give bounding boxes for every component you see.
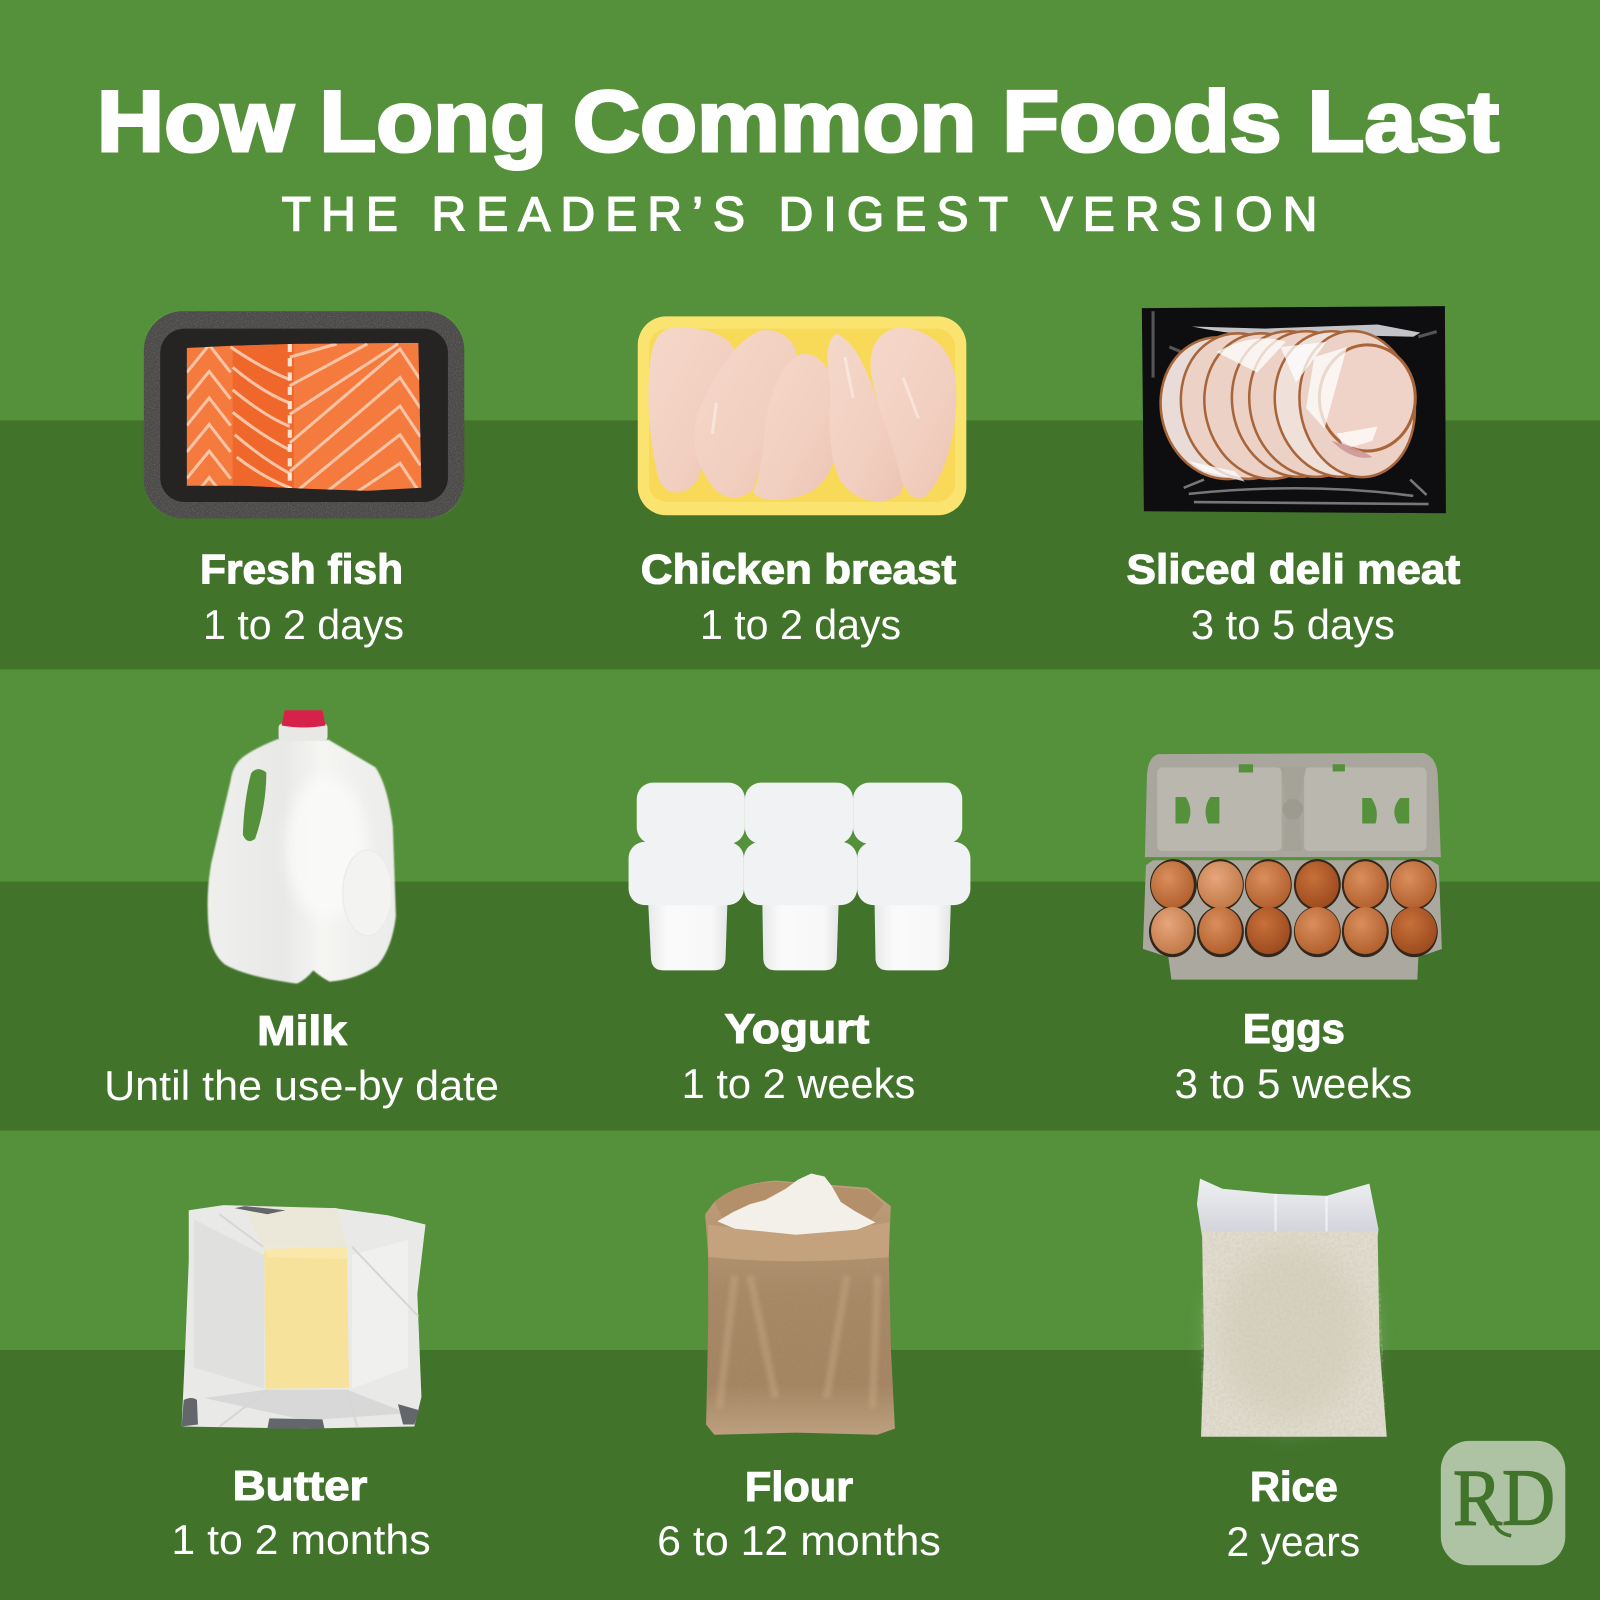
label: milk: Milk — [257, 1007, 348, 1054]
label: eggs: Eggs — [1243, 1005, 1345, 1052]
icon: plastic bag of rice — [1197, 1179, 1387, 1437]
label: chicken breast: Chicken breast — [641, 546, 956, 593]
icon: salmon in dark tray — [144, 311, 464, 518]
label: yogurt: Yogurt — [724, 1005, 869, 1052]
label: fresh fish: Fresh fish — [200, 546, 403, 593]
item: flour — [657, 1173, 941, 1564]
subtitle: THE READER’S DIGEST VERSION — [282, 189, 1317, 242]
logo: RD badge — [1441, 1441, 1565, 1565]
label: butter: Butter — [233, 1462, 367, 1509]
label: flour: Flour — [745, 1463, 853, 1510]
icon: butter on wrapper — [182, 1205, 426, 1429]
label: rice: Rice — [1250, 1463, 1338, 1510]
item: chicken breast — [638, 316, 966, 648]
item: fresh fish — [144, 311, 464, 648]
value: milk: Until the use-by date — [104, 1062, 499, 1109]
value: fresh fish: 1 to 2 days — [203, 601, 404, 648]
item: milk — [104, 710, 499, 1109]
icon: milk jug — [208, 710, 396, 984]
item: yogurt — [629, 783, 970, 1107]
value: chicken breast: 1 to 2 days — [700, 601, 901, 648]
item: rice — [1197, 1179, 1387, 1565]
icon: chicken on yellow tray — [638, 316, 966, 515]
value: yogurt: 1 to 2 weeks — [682, 1060, 915, 1107]
value: rice: 2 years — [1227, 1518, 1360, 1565]
value: sliced deli meat: 3 to 5 days — [1191, 601, 1395, 648]
icon: paper bag of flour — [705, 1173, 895, 1436]
title: How Long Common Foods Last — [97, 73, 1499, 170]
value: eggs: 3 to 5 weeks — [1174, 1060, 1412, 1107]
item: sliced deli meat — [1127, 306, 1460, 648]
icon: six yogurt cups — [629, 783, 970, 970]
item: butter — [171, 1205, 431, 1563]
value: butter: 1 to 2 months — [171, 1516, 431, 1563]
icon: open egg carton — [1143, 753, 1442, 980]
logo: RD badge: RD — [1453, 1453, 1555, 1542]
value: flour: 6 to 12 months — [657, 1517, 941, 1564]
label: sliced deli meat: Sliced deli meat — [1127, 546, 1460, 593]
item: eggs — [1143, 753, 1442, 1107]
icon: vacuum pack of sliced meat — [1142, 306, 1446, 513]
